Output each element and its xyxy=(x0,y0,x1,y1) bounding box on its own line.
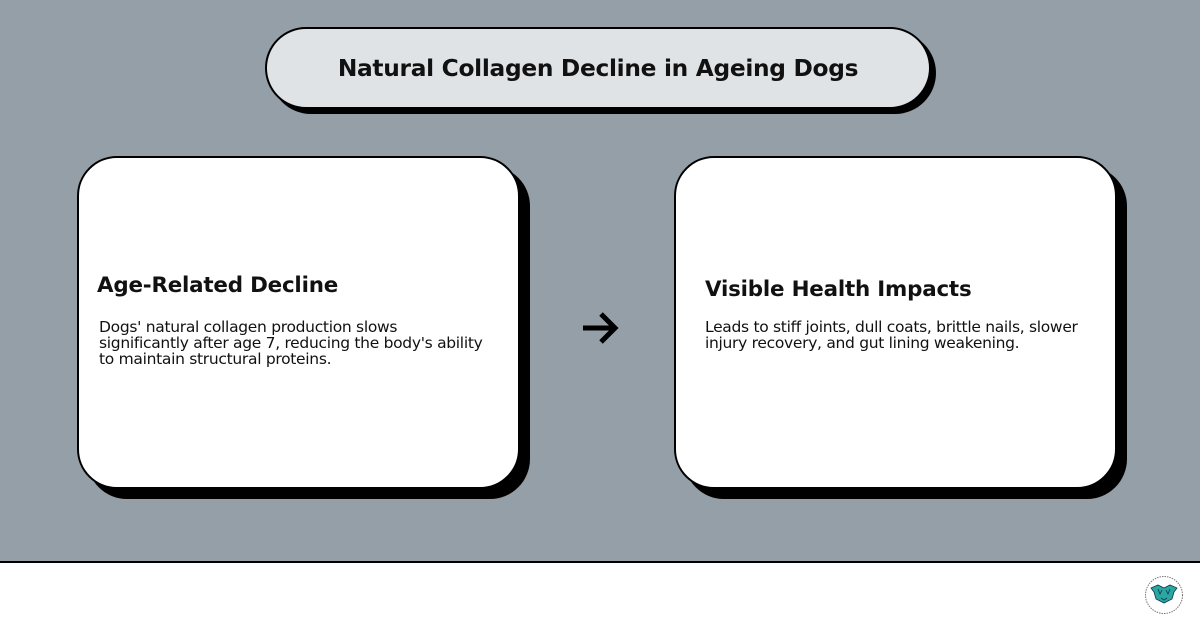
text block: impacts description: injury recovery, and gut lining weakening. xyxy=(705,334,1019,352)
title xyxy=(265,27,931,109)
arrow xyxy=(583,312,618,344)
heading: age-related decline: Age-Related Decline xyxy=(97,273,338,298)
icon: dog logo xyxy=(1145,576,1183,614)
panel: age-related decline xyxy=(77,156,520,489)
heading: visible health impacts: Visible Health Impacts xyxy=(705,277,971,302)
text block: decline description: significantly after age 7, reducing the body's ability xyxy=(99,334,482,352)
title: Natural Collagen Decline in Ageing Dogs xyxy=(338,54,858,82)
text block: decline description xyxy=(99,318,482,368)
text block: impacts description: Leads to stiff joints, dull coats, brittle nails, slower xyxy=(705,318,1078,336)
text block: impacts description xyxy=(705,318,1078,352)
text block: decline description: to maintain structural proteins. xyxy=(99,350,331,368)
text block: decline description: Dogs' natural collagen production slows xyxy=(99,318,397,336)
panel: visible health impacts xyxy=(674,156,1117,489)
